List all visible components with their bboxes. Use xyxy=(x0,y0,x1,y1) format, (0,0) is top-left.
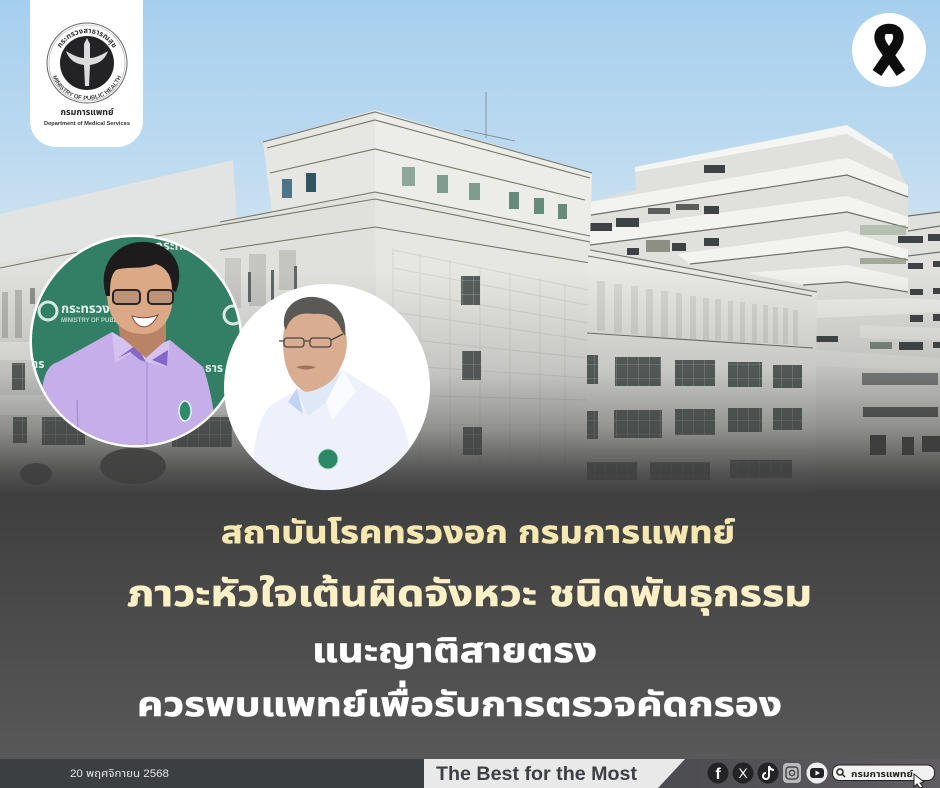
shirt emblem xyxy=(179,401,191,421)
slogan banner: The Best for the Most xyxy=(436,764,638,785)
neck and face xyxy=(283,314,347,392)
icon: tiktok xyxy=(758,762,778,784)
dark text panel xyxy=(0,494,940,760)
shirt xyxy=(42,332,214,450)
right wing windows xyxy=(587,355,802,480)
footer bar xyxy=(0,759,940,788)
icon: ministry seal xyxy=(46,22,128,104)
face xyxy=(107,258,173,334)
main block front xyxy=(0,192,590,500)
heading: condition name: ภาวะหัวใจเต้นผิดจังหวะ ชนิดพันธุกรรม xyxy=(127,573,812,615)
tower windows xyxy=(282,167,567,219)
antenna xyxy=(464,92,515,141)
search pill xyxy=(832,765,934,780)
backdrop logos: MINISTRY OF PUBLIC xyxy=(61,318,124,324)
heading: advice line two: ควรพบแพทย์เพื่อรับการตรวจคัดกรอง xyxy=(137,680,782,724)
far right tiered building xyxy=(585,125,940,490)
icon: ministry seal: กระทรวงสาธารณสุข xyxy=(58,28,116,48)
slogan banner xyxy=(424,759,685,788)
hair xyxy=(104,242,179,296)
icon: youtube xyxy=(806,762,828,784)
icon: X: X xyxy=(738,765,748,781)
mouth xyxy=(296,366,316,370)
logo English name: Department of Medical Services xyxy=(44,121,130,127)
backdrop logos: กระทรวง xyxy=(155,238,204,253)
backdrop logos xyxy=(33,238,242,375)
smile xyxy=(132,315,158,327)
dark fade over building xyxy=(0,270,940,495)
backdrop logos: กระทรวง xyxy=(61,301,110,316)
icon: facebook xyxy=(708,762,728,784)
icon: cursor xyxy=(914,774,924,788)
backdrop logos: าร xyxy=(33,357,44,371)
main block panel grid xyxy=(393,248,588,470)
shirt emblem xyxy=(318,449,338,469)
hair xyxy=(284,297,345,336)
background: hospital building xyxy=(0,92,940,500)
icon: mourning ribbon xyxy=(852,13,926,87)
footer date: 20 พฤศจิกายน 2568 xyxy=(70,768,169,780)
right wing slits xyxy=(597,281,798,345)
background: sky xyxy=(0,0,940,300)
glasses xyxy=(113,290,173,304)
left façade piers and windows xyxy=(0,250,297,485)
shirt xyxy=(253,370,412,495)
left low wing xyxy=(0,160,240,300)
main tower xyxy=(263,110,592,240)
main block windows xyxy=(461,276,482,455)
collar xyxy=(112,332,170,367)
glasses xyxy=(279,334,343,347)
icon: X xyxy=(732,762,754,784)
tower ledge lines xyxy=(0,112,592,268)
icon: ministry seal: MINISTRY OF PUBLIC HEALTH xyxy=(52,75,122,100)
portrait: man in purple shirt xyxy=(30,234,242,450)
icon: instagram xyxy=(783,763,801,783)
logo Thai name: กรมการแพทย์ xyxy=(60,107,114,117)
neck xyxy=(118,322,166,358)
heading: institute name: สถาบันโรคทรวงอก กรมการแพทย์ xyxy=(221,515,735,550)
backdrop logos: ธาร xyxy=(205,361,223,375)
portrait: man in white shirt xyxy=(224,284,430,495)
right wing xyxy=(586,250,817,500)
icon: facebook: f xyxy=(715,766,721,783)
logo card xyxy=(30,0,143,147)
search pill: กรมการแพทย์ xyxy=(851,769,913,779)
heading: advice line one: แนะญาติสายตรง xyxy=(312,632,597,670)
